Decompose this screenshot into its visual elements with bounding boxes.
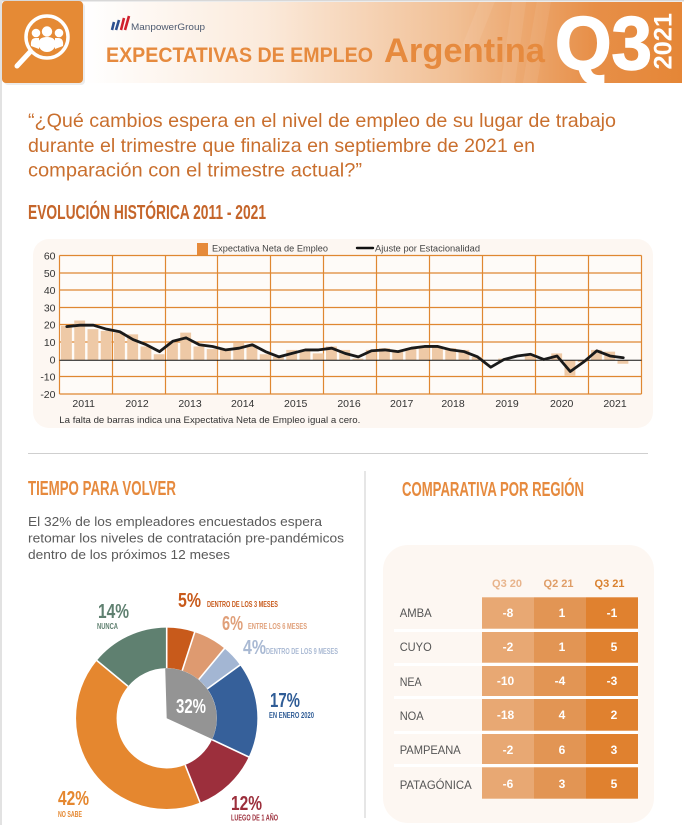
survey question: “¿Qué cambios espera en el nivel de empleo de su lugar de trabajo [28,110,616,132]
x axis labels: 2015 [284,398,308,410]
y axis labels [40,250,56,401]
y axis labels: 10 [44,337,56,349]
panel: regional comparison table [383,545,654,823]
legend: Ajuste por Estacionalidad [375,244,480,254]
panel: historical chart [33,239,653,428]
y axis labels: 30 [44,302,56,314]
label: 5% [178,590,278,612]
label: 4% [243,637,338,659]
x axis labels: 2021 [603,398,627,410]
title: Argentina: Argentina [384,32,546,70]
text block: 32% return: dentro de los próximos 12 meses [28,547,230,562]
column headers [492,578,624,590]
logo: ManpowerGroup: ManpowerGroup [131,22,205,32]
row: NEA: -4 [555,674,566,688]
y axis labels: -20 [40,389,56,401]
label: 14%: NUNCA [97,622,118,631]
line: seasonally adjusted [67,325,623,372]
row: NOA: 4 [559,708,566,722]
y axis labels: -10 [40,372,56,384]
row: PAMPEANA [400,734,638,764]
survey question: comparación con el trimestre actual?” [28,160,362,182]
row: AMBA: AMBA [400,606,432,620]
y axis labels: 40 [44,285,56,297]
survey question [28,110,616,182]
x axis labels: 2020 [550,398,574,410]
y axis labels: 60 [44,250,56,262]
survey question: durante el trimestre que finaliza en septiembre de 2021 en [28,135,535,157]
line and bar chart [60,256,642,394]
label: 6% [222,613,307,635]
row: CUYO: 5 [611,640,618,654]
row: NOA: -18 [497,708,514,722]
row: CUYO: -2 [503,640,514,654]
row: PAMPEANA: 3 [611,743,618,757]
logo: ManpowerGroup [112,16,205,32]
row: PAMPEANA: PAMPEANA [400,743,461,757]
x axis labels: 2018 [441,398,465,410]
quarter: Q3: Q3 [555,1,652,85]
row: NEA [400,666,638,696]
label: 42% [58,788,89,819]
row: PATAGÓNICA [400,767,638,799]
label: 17% [269,690,314,720]
row: NOA: NOA [400,709,424,723]
row: PATAGÓNICA: 3 [559,777,566,791]
row: NOA [400,699,638,731]
row: CUYO [400,632,638,663]
label: 14%: 14% [98,601,129,623]
label: 42%: NO SABE [58,810,82,819]
legend [197,243,480,256]
x axis labels: 2017 [390,398,414,410]
label: 6%: 6% [222,613,243,635]
x axis labels: 2016 [337,398,361,410]
row: AMBA: -1 [607,606,618,620]
x axis labels: 2012 [125,398,149,410]
label: 6%: ENTRE LOS 6 MESES [248,622,307,631]
x axis labels: 2013 [178,398,202,410]
bars: net employment outlook [61,321,628,376]
title: Expectativas de empleo: EXPECTATIVAS DE EMPLEO [106,43,373,67]
year: 2021: 2021 [650,13,678,70]
text block: 32% return: retomar los niveles de contratación pre-pandémicos [28,530,344,546]
column headers: Q3 21 [595,578,624,590]
label: 14% [97,601,129,631]
text block: 32% return [28,514,344,562]
label: 5%: DENTRO DE LOS 3 MESES [207,600,278,609]
heading: evolución histórica: EVOLUCIÓN HISTÓRICA 2011 - 2021 [28,200,266,224]
row: PAMPEANA: -2 [503,743,514,757]
row: NEA: -3 [607,674,618,688]
row: NEA: NEA [400,675,422,689]
y axis labels: 50 [44,268,56,280]
label: 4%: 4% [243,637,266,659]
y axis labels: 20 [44,320,56,332]
icon: magnifier with people [2,1,85,85]
x axis labels: 2019 [495,398,519,410]
row: AMBA: 1 [559,606,566,620]
label: 17%: 17% [270,690,300,712]
row: PATAGÓNICA: -6 [503,777,514,791]
x axis labels: 2011 [72,398,95,410]
row: PATAGÓNICA: 5 [611,777,618,791]
label: 12%: LUEGO DE 1 AÑO [231,814,278,822]
row: AMBA: -8 [503,606,514,620]
heading: comparativa por región: COMPARATIVA POR REGIÓN [402,477,584,501]
row: NOA: 2 [611,708,618,722]
text block: 32% return: El 32% de los empleadores encuestados espera [28,514,323,529]
label: 17%: EN ENERO 2020 [269,711,314,720]
row: PATAGÓNICA: PATAGÓNICA [400,777,472,792]
row: CUYO: 1 [559,640,566,654]
y axis labels: 0 [50,355,56,367]
x axis labels [72,398,627,410]
header banner [2,0,684,85]
row: AMBA [400,597,638,629]
row: NEA: -10 [497,674,514,688]
chart footnote: La falta de barras indica una Expectativa Neta de Empleo igual a cero. [59,415,360,425]
center value: 32% [176,696,206,718]
label: 12%: 12% [231,793,262,815]
legend: Expectativa Neta de Empleo [212,244,328,254]
heading: tiempo para volver: TIEMPO PARA VOLVER [28,478,176,500]
row separators [394,629,638,767]
row: CUYO: CUYO [400,640,432,654]
label: 4%: DENTRO DE LOS 9 MESES [266,647,338,656]
donut chart [96,626,250,804]
column headers: Q3 20 [492,578,522,590]
x axis labels: 2014 [231,398,255,410]
column headers: Q2 21 [544,578,573,590]
label: 12% [231,793,278,822]
label: 42%: 42% [58,788,89,810]
row: PAMPEANA: 6 [559,743,566,757]
label: 5%: 5% [178,590,201,612]
